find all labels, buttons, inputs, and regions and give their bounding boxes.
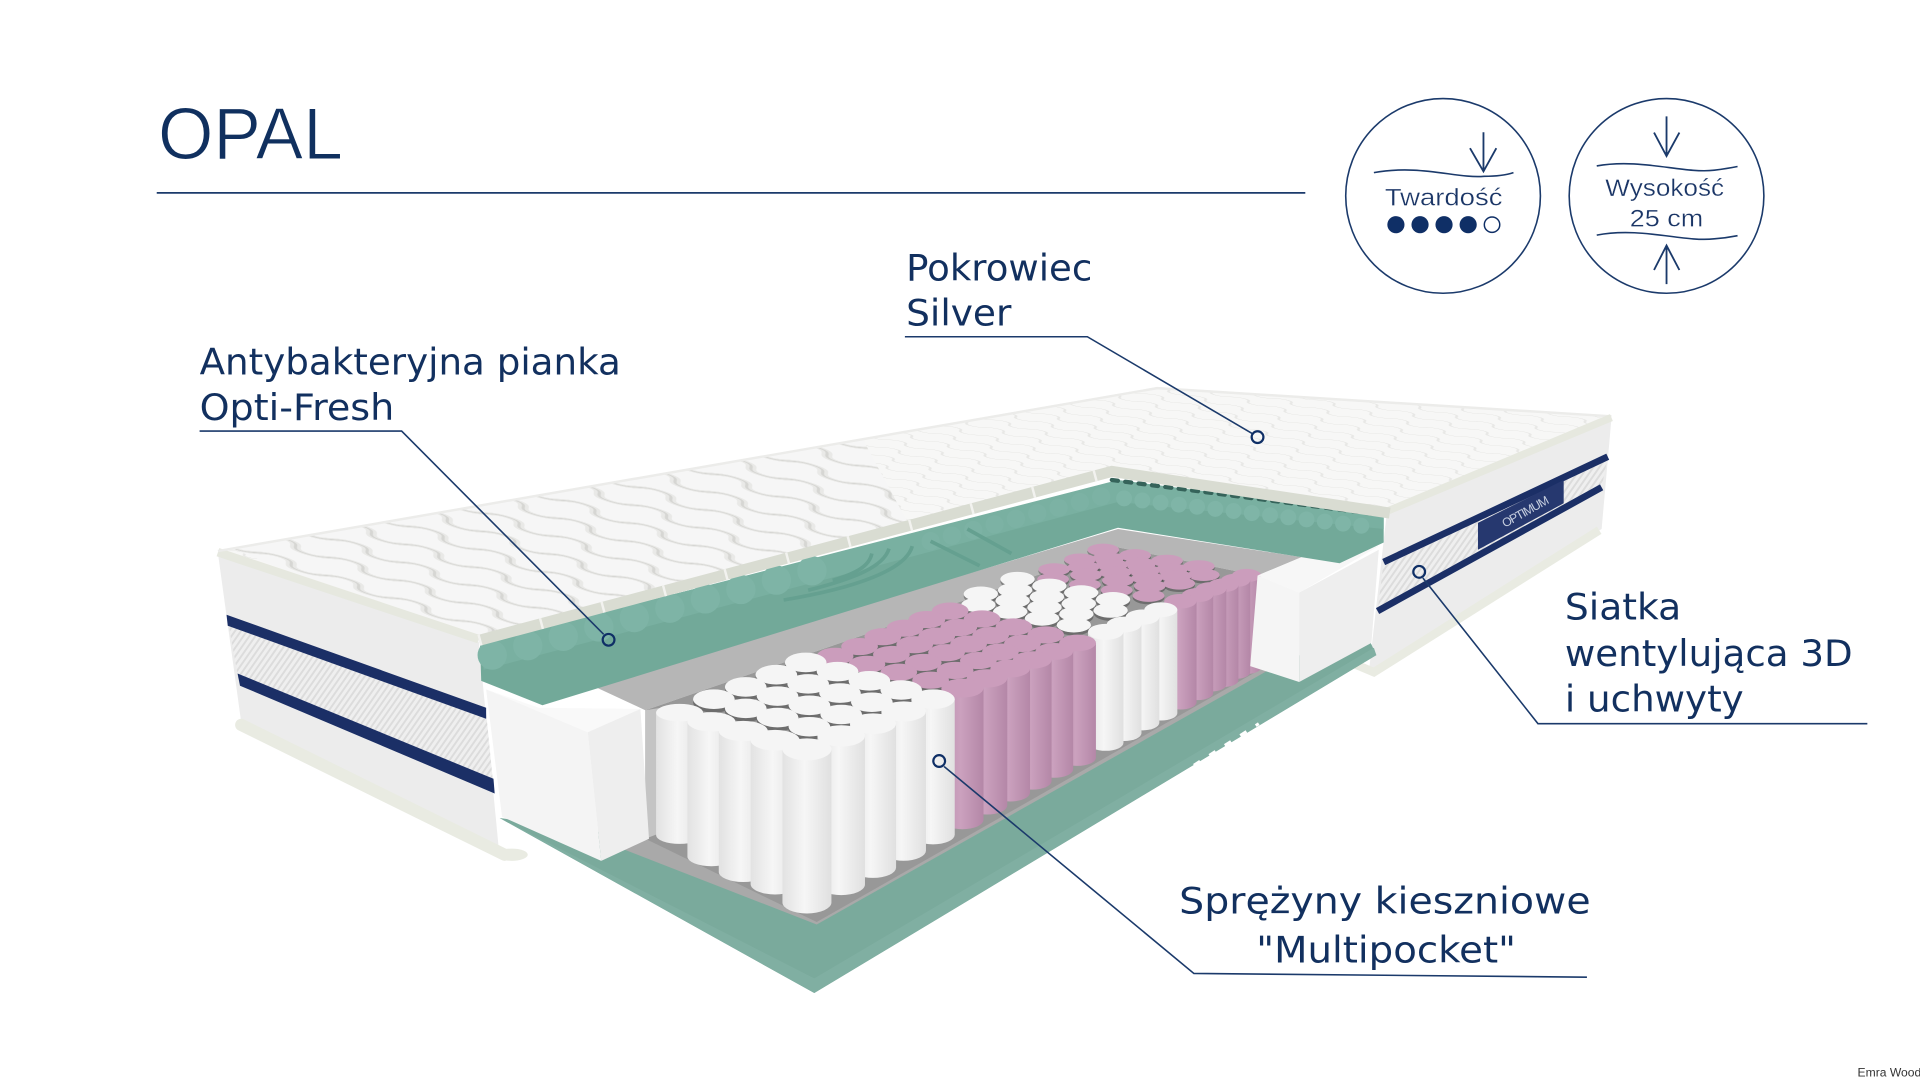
panel: right side cover — [1351, 419, 1611, 672]
callout: pocket springs: Sprężyny kieszniowe — [1179, 879, 1591, 922]
callout: antibacterial foam: Opti-Fresh — [200, 386, 394, 429]
panel: base foam slab — [500, 639, 1376, 993]
icon: firmness badge: Twardość — [1385, 185, 1502, 212]
callout: ventilating mesh: Siatka — [1565, 586, 1681, 629]
icon: height badge: 25 cm — [1630, 206, 1703, 233]
callout: antibacterial foam — [200, 341, 621, 646]
icon: brand label — [1478, 480, 1564, 550]
icon: brand label: OPTIMUM — [1500, 493, 1551, 530]
callout: cover: Pokrowiec — [906, 246, 1092, 289]
panel: left side cover — [218, 553, 528, 861]
panel: antibacterial foam layer — [480, 480, 1386, 705]
callout: ventilating mesh: i uchwyty — [1565, 677, 1744, 720]
panel: left white foam block — [486, 689, 649, 861]
callout: antibacterial foam: Antybakteryjna pianka — [200, 341, 621, 384]
callout: cover — [905, 246, 1263, 443]
callout: pocket springs: "Multipocket" — [1256, 928, 1516, 971]
panel: right white foam block — [1250, 546, 1379, 682]
mattress illustration — [218, 387, 1611, 993]
callout: cover: Silver — [906, 292, 1012, 335]
title: OPAL — [158, 92, 343, 175]
title rule — [157, 192, 1305, 194]
icon: height badge — [1569, 99, 1764, 293]
pocket springs — [656, 544, 1261, 913]
callout: pocket springs — [933, 755, 1591, 977]
callout: ventilating mesh: wentylująca 3D — [1565, 632, 1853, 675]
icon: height badge: Wysokość — [1605, 175, 1724, 202]
icon: firmness badge — [1346, 99, 1540, 293]
panel: grey felt layers — [593, 529, 1302, 924]
panel: top quilted cover — [218, 387, 1611, 640]
credit: Emra Wood — [1858, 1065, 1920, 1079]
callout: ventilating mesh — [1413, 566, 1867, 724]
